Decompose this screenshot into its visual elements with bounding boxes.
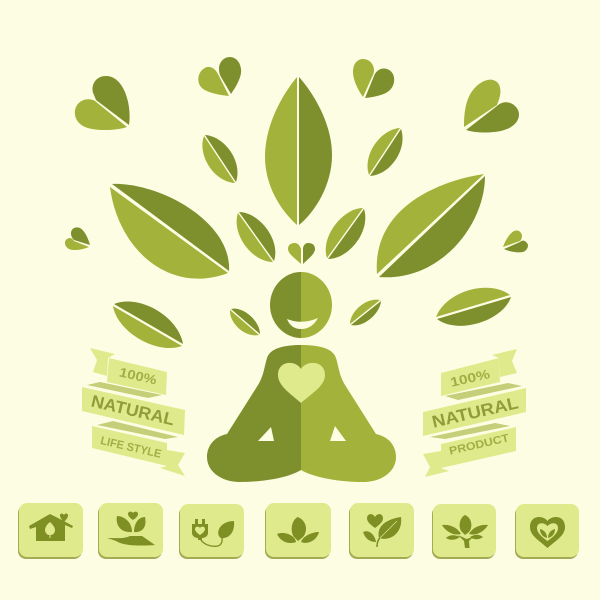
leaf: large right <box>377 174 485 277</box>
leaf: small inner left <box>237 212 275 262</box>
ribbon text: natural: NATURAL <box>89 392 176 429</box>
body <box>207 345 396 482</box>
icon button: plug and leaf <box>179 504 244 559</box>
ribbon: 100% natural product <box>423 349 526 477</box>
icon button: heart with leaves <box>515 504 579 559</box>
leaf: large center <box>265 77 332 225</box>
ribbon text: 100%: 100% <box>118 364 159 388</box>
heart leaf: center <box>288 243 315 264</box>
ribbon text: life style: LIFE STYLE <box>99 435 163 461</box>
chest heart <box>278 363 325 403</box>
heart leaf: upper left <box>75 76 130 130</box>
ribbon text: product: PRODUCT <box>448 432 511 458</box>
leaf: small inner right <box>326 208 365 259</box>
icon button: hand and plant <box>98 503 163 559</box>
leaf: large left <box>110 184 229 279</box>
heart leaf: small right <box>503 230 528 252</box>
ribbon: 100% natural life style <box>82 348 185 476</box>
heart leaf: small left <box>65 227 90 250</box>
leaf: small upper right <box>368 128 403 176</box>
arm gaps <box>258 426 346 441</box>
heart leaf: top right <box>353 59 394 98</box>
heart leaf: upper right <box>464 80 519 132</box>
icon button: heart and sprout <box>349 503 414 559</box>
icon button: house <box>18 503 83 559</box>
ribbon text: 100%: 100% <box>449 366 492 390</box>
leaf: lower left <box>113 302 183 348</box>
heart leaf: top left <box>198 57 241 96</box>
head <box>270 272 332 338</box>
leaf: lower right <box>436 288 511 326</box>
leaf: beside head right <box>350 300 381 325</box>
icon button: three leaves <box>265 503 331 559</box>
figure: meditating person <box>207 272 396 482</box>
ribbon text: natural: NATURAL <box>430 393 520 432</box>
leaf: small upper left <box>202 135 237 183</box>
leaf: beside head left <box>230 309 260 335</box>
smile <box>287 318 318 329</box>
icon button: tree <box>432 504 496 559</box>
